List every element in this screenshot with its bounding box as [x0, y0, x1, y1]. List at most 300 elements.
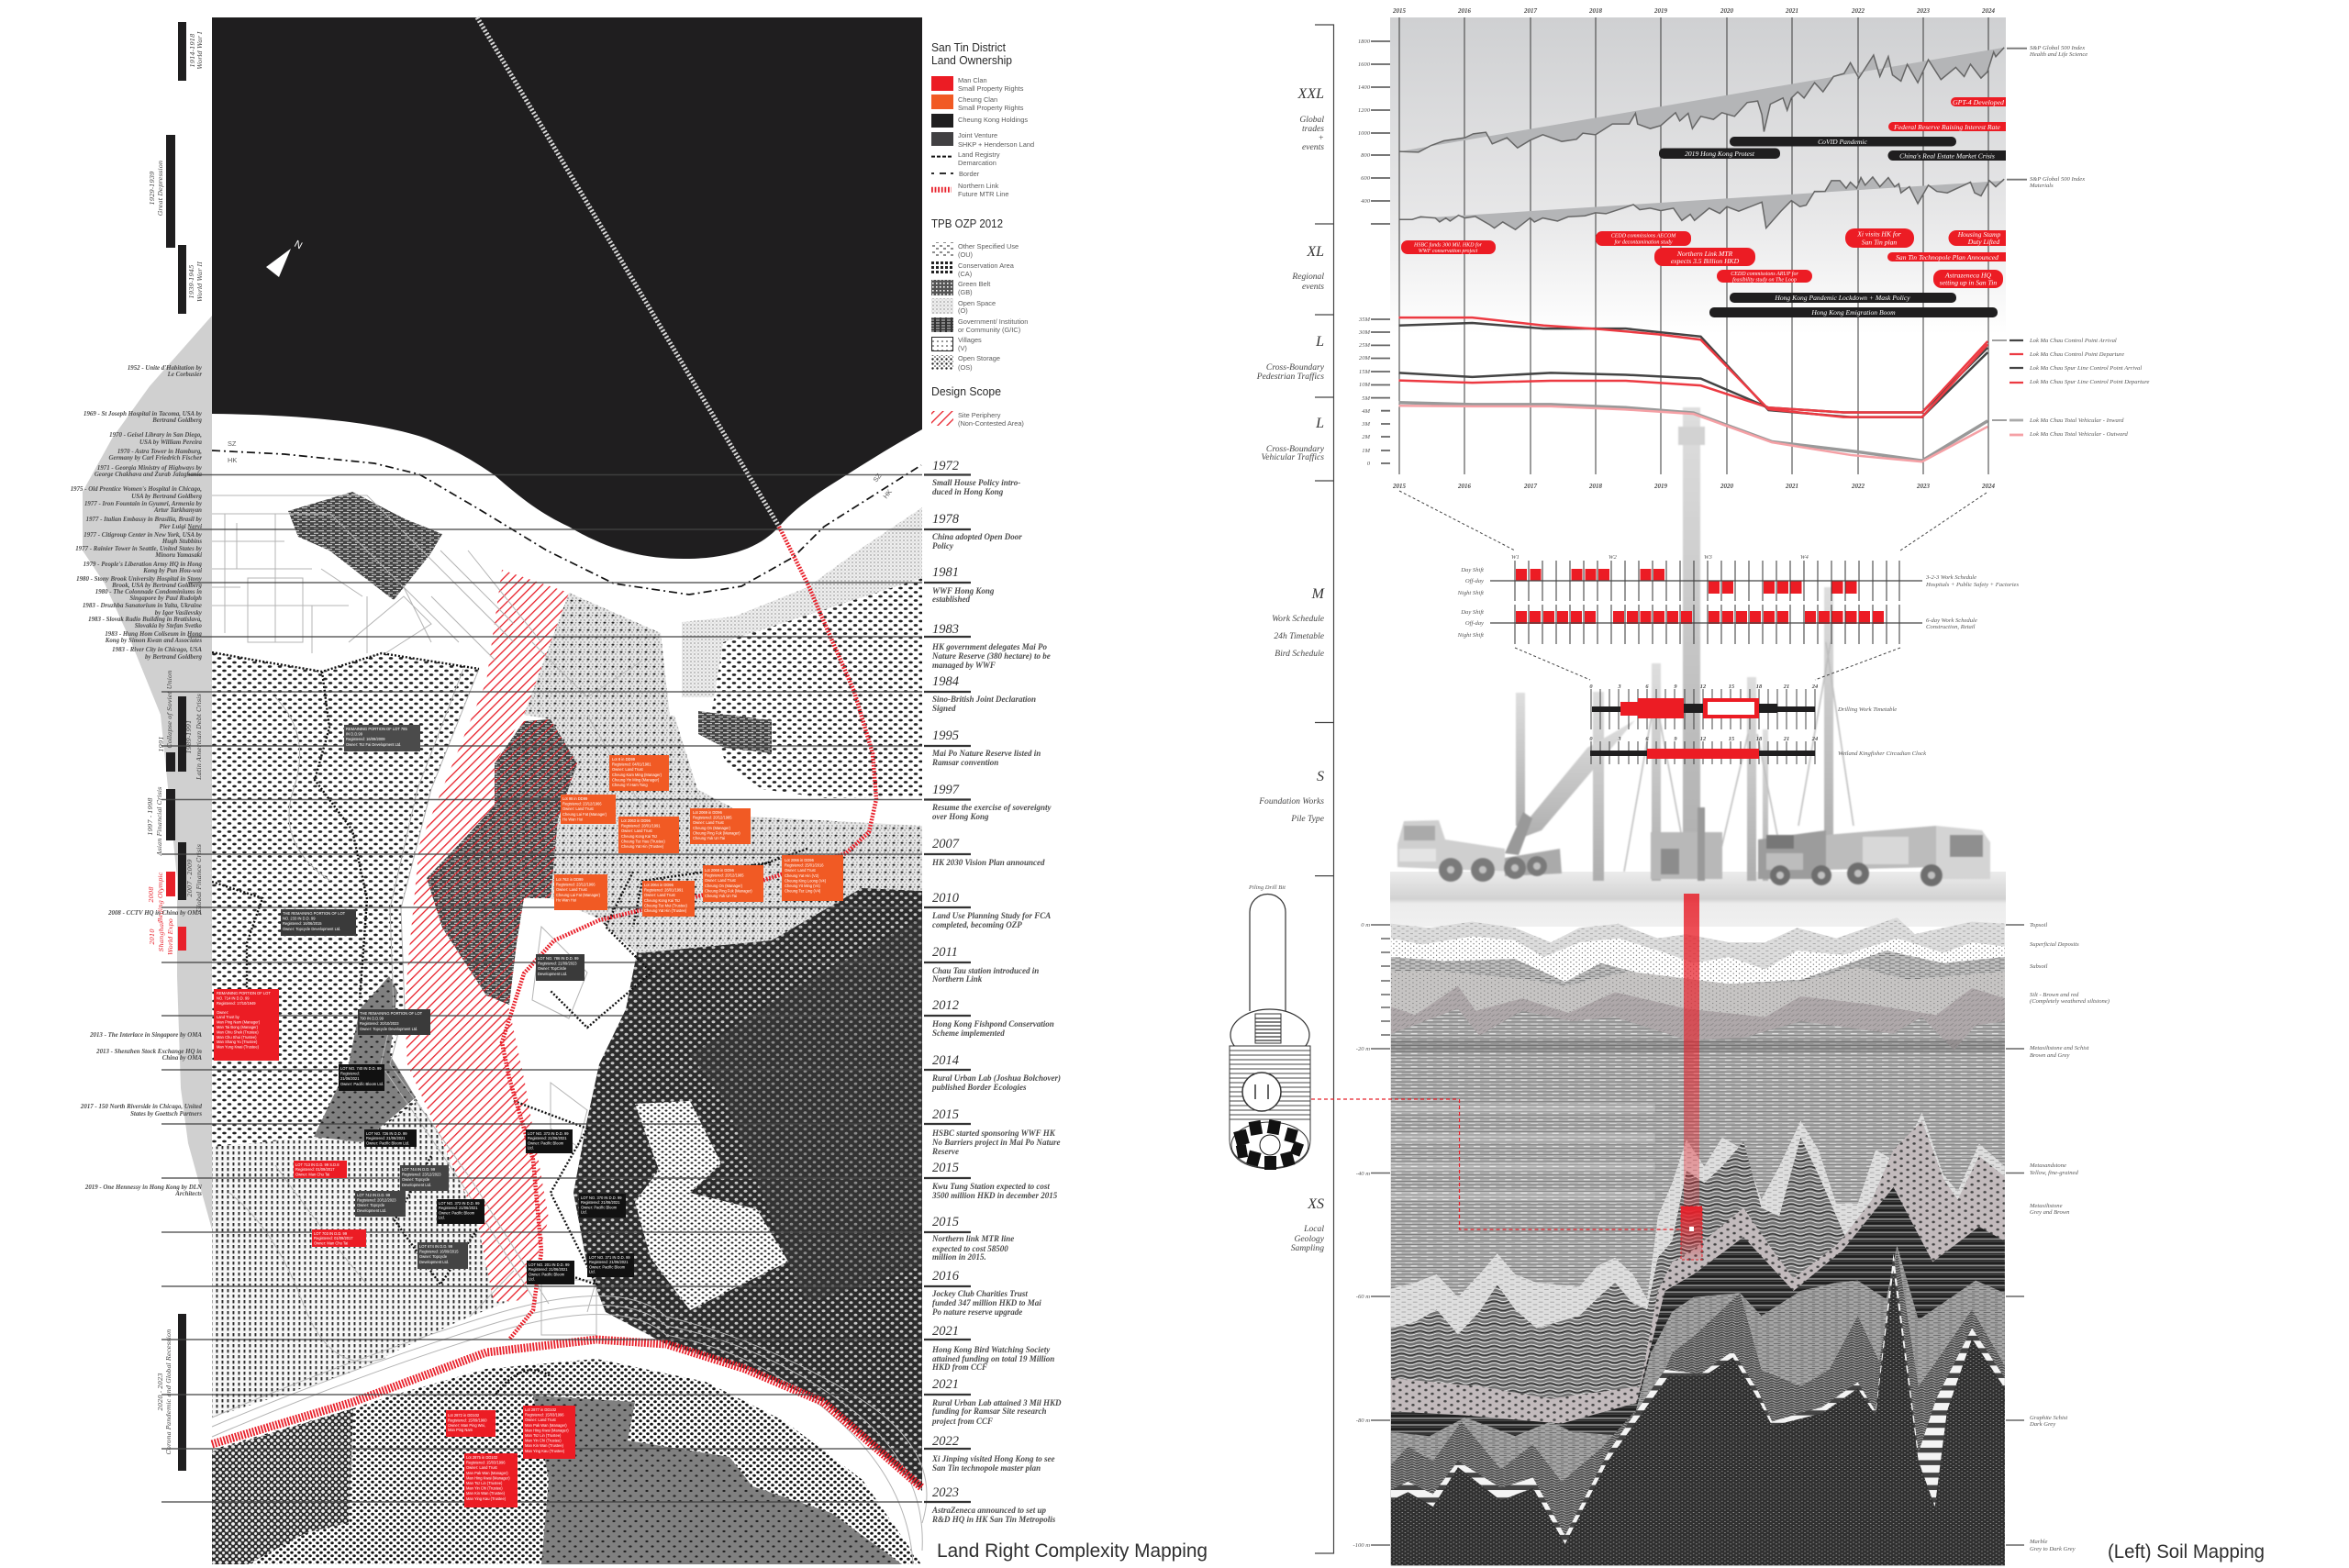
event pills: regional and global events red: San Tin Technopole Plan Announced [1896, 253, 1998, 261]
architecture project list: Artur Tarkhanyan [153, 507, 202, 514]
land parcels: joint venture grey labels: Owner: Topcycle Development Ltd. [360, 1027, 417, 1031]
timeline text: years and events: R&D HQ in HK San Tin Metropolis [931, 1515, 1056, 1524]
legend: San Tin District Land Ownership: Land Ownership [931, 53, 1012, 67]
architecture project list: George Chakhava and Zurab Jalaghania [95, 472, 203, 478]
land parcels: Cheung Kong Holdings black labels: LOT NO. 370 IN D.D. 99 [581, 1195, 622, 1200]
land parcels: Cheung Clan orange labels: Cheung Tsz Mui (Trustee) [644, 903, 688, 907]
icon: piling drill bit [1230, 884, 1310, 1170]
land parcels: joint venture grey labels: Owner: Topcycle Development Ltd. [283, 927, 340, 931]
land parcels: Man Clan red labels: Man Yin Chi (Trustee) [466, 1486, 503, 1491]
timeline bars: historical events: 1997 - 1998 [147, 797, 154, 836]
timeline text: years and events: Ramsar convention [931, 758, 998, 767]
event pills: global events black: China's Real Estate Market Crisis [1899, 152, 1995, 160]
architecture project list: 1977 - Citigroup Center in New York, USA by [83, 532, 203, 539]
series: spur line departure [1398, 341, 1987, 412]
land parcels: Cheung Kong Holdings black labels: Owner: Pacific Bloom Ltd. [340, 1082, 384, 1086]
section labels: Cross-Boundary [1266, 362, 1325, 373]
map zone: right dotted villages [711, 578, 922, 798]
stratum: mid grey schist [1391, 1246, 2005, 1518]
land parcels: joint venture grey labels: 790 IN D.D.99 [360, 1017, 384, 1021]
section labels: Geology [1294, 1234, 1325, 1244]
stratum: superficial deposits [1391, 936, 2005, 1429]
map zone: top-right fine marsh [682, 507, 922, 697]
y axis: index values and traffic: 30M [1358, 329, 1371, 336]
timeline text: years and events: HK government delegates Mai Po [931, 642, 1047, 651]
event pills: global events black: 2019 Hong Kong Protest [1685, 150, 1755, 158]
timeline text: years and events: 2007 [932, 837, 960, 851]
timeline bars: historical events: 1914-1918 [189, 33, 196, 67]
traffic legend: Lok Ma Chau Control Point Arrival [2029, 338, 2117, 344]
timeline text: years and events: 1972 [932, 459, 959, 473]
land parcels: Man Clan red labels: Man Yung Kwai (Trustee) [217, 1045, 260, 1050]
land parcels: Cheung Clan orange labels: Owner: Land Trust [644, 893, 676, 897]
architecture project list: Singapore by Paul Rudolph [129, 595, 202, 602]
legend: San Tin District Land Ownership: Future MTR Line [958, 190, 1008, 198]
architecture project list: 1980 - The Colonnade Condominiums in [95, 589, 202, 595]
map zone: top-left hatched patch [288, 492, 442, 600]
series: spur line arrival [1398, 348, 1987, 412]
timeline bars: historical events: Shanghai [158, 922, 165, 951]
traffic legend: Lok Ma Chau Control Point Departure [2029, 351, 2124, 358]
architecture project list: 1979 - People's Liberation Army HQ in Hong [83, 562, 203, 568]
north arrow [266, 239, 304, 277]
timeline text: years and events: 2021 [932, 1324, 959, 1339]
architecture project list: 1975 - Old Prentice Women's Hospital in Chicago, [71, 486, 202, 493]
border labels: HK [228, 456, 237, 464]
24h kingfisher circadian clock: 6 [1645, 736, 1649, 742]
architecture project list: 1983 - Slovak Radio Building in Bratislava, [88, 617, 202, 623]
24h kingfisher circadian clock: 12 [1700, 736, 1707, 742]
architecture project list: 2008 - CCTV HQ in China by OMA [107, 910, 202, 917]
land parcels: Cheung Clan orange labels: Owner: Land Trust [621, 828, 653, 833]
stratum: dark stripes [1391, 1187, 2005, 1565]
event pills: regional and global events red: setting up in San Tin [1940, 279, 1997, 286]
land parcels: joint venture grey labels: LOT NO. 786 IN D.D. 99 [538, 956, 579, 961]
timeline text: years and events: 2010 [932, 891, 960, 906]
land parcels: Cheung Clan orange labels: Cheung Yin Ming (Manager) [612, 777, 660, 782]
y axis: index values and traffic: 1800 [1358, 39, 1371, 45]
land parcels: Man Clan red labels: Man Kin Wan (Trustee) [525, 1443, 564, 1448]
section labels: XS [1307, 1196, 1324, 1212]
series: health and life science [1399, 48, 2004, 152]
map zone: bottom grey parcel [533, 1396, 902, 1564]
work schedule grid: Day Shift [1460, 609, 1484, 616]
land parcels: Cheung Kong Holdings black labels: LOT NO. 371 IN D.D. 99 [589, 1255, 630, 1260]
land parcels: Cheung Clan orange labels: Ho Wan Hui [556, 897, 576, 902]
legend: TPB OZP 2012: (GB) [958, 288, 973, 296]
y axis: index values and traffic: 10M [1359, 382, 1371, 388]
land parcels: Cheung Kong Holdings black labels: Ltd. [439, 1216, 445, 1220]
timeline text: years and events: Kwu Tung Station expected to cost [931, 1182, 1050, 1191]
sampling callout dashed lines [1311, 1099, 1681, 1229]
timeline text: years and events: San Tin technopole master plan [932, 1463, 1041, 1473]
land parcels: Man Clan red labels: Owner: [217, 1010, 228, 1015]
land parcels: Cheung Clan orange labels: Lot 2068 in DD96 [705, 868, 735, 873]
legend: TPB OZP 2012: Open Storage [958, 354, 1000, 362]
architecture project list: 1980 - Stony Brook University Hospital in Stony [76, 576, 203, 583]
soil layer legend: Dark Grey [2029, 1421, 2055, 1428]
section labels: 24h Timetable [1274, 631, 1325, 641]
land parcels: Man Clan red labels: Owner: Man Chu Tai [295, 1172, 329, 1176]
land parcels: joint venture grey labels: Registered: 23/12/2023 [402, 1173, 441, 1177]
work schedule grid: W3 [1704, 554, 1712, 561]
architecture project list: Architects [174, 1191, 202, 1197]
legend: TPB OZP 2012: Other Specified Use [958, 242, 1019, 250]
architecture project list: Germany by Carl Friedrich Fischer [109, 455, 202, 462]
soil section: geological strata [1391, 917, 2005, 1565]
legend: TPB OZP 2012: (V) [958, 344, 967, 352]
soil depth scale: -20 m [1356, 1046, 1370, 1052]
legend: San Tin District Land Ownership: Small Property Rights [958, 104, 1024, 112]
y axis: index values and traffic: 1600 [1358, 61, 1371, 68]
legend: TPB OZP 2012: (OU) [958, 250, 973, 259]
land parcels: Cheung Clan orange labels: Lot 763 in DD99 [556, 877, 584, 882]
timeline text: years and events: Mai Po Nature Reserve listed in [931, 749, 1041, 758]
24h kingfisher circadian clock: Wetland Kingfisher Circadian Clock [1838, 751, 1927, 757]
land parcels: Cheung Clan orange labels: Registered: 20/12/1985 [693, 816, 732, 820]
timeline text: years and events: established [932, 595, 971, 604]
land parcels: Man Clan red labels: Man Ping Nam (Manager) [217, 1020, 261, 1025]
land parcels: Man Clan red labels: Lot 2872 in DD102 [448, 1413, 480, 1418]
land parcels: Cheung Kong Holdings black labels: LOT NO. 373 IN D.D. 99 [528, 1131, 569, 1136]
timeline bars: historical events: Global Finance Crisis [195, 844, 203, 912]
land parcels: Man Clan red labels: Owner: Man Chu Tai [314, 1240, 348, 1245]
legend: Design Scope: Site Periphery [958, 411, 1001, 419]
timeline bars: historical events: Beijing Olympic [157, 872, 164, 923]
traffic legend: Lok Ma Chau Spur Line Control Point Departure [2029, 379, 2150, 385]
land parcels: Man Clan red labels: Man Pak Wan (Manager) [466, 1471, 508, 1475]
land parcels: Cheung Clan orange labels: Cheung Yit Ming (V4) [785, 884, 821, 888]
S&P index legend: S&P Global 500 Index [2030, 176, 2085, 183]
timeline text: years and events: 2022 [932, 1434, 959, 1449]
year axis labels top and bottom: 2022 [1851, 483, 1865, 490]
event pills: regional and global events red: Xi visits HK for [1856, 229, 1901, 239]
timeline bars: historical events: 1991 [158, 736, 165, 752]
soil layer legend: Superficial Deposits [2030, 941, 2079, 948]
event pills: regional and global events red: CEDD commissions ARUP for [1731, 271, 1798, 277]
land parcels: Cheung Kong Holdings black labels: Owner: Pacific Bloom [439, 1210, 475, 1215]
timeline bars: historical events: 2020 - 2023 [157, 1373, 164, 1412]
year axis labels top and bottom: 2015 [1392, 7, 1406, 15]
24h kingfisher circadian clock: 3 [1617, 736, 1621, 742]
legend: San Tin District Land Ownership: SHKP + Henderson Land [958, 140, 1034, 149]
land parcels: Cheung Kong Holdings black labels [339, 1064, 634, 1284]
northern link future MTR line over sea [477, 17, 779, 527]
architecture project list: Bertrand Goldberg [151, 417, 203, 424]
land parcels: joint venture grey labels: THE REMAINING PORTION OF LOT [283, 911, 346, 916]
legend: TPB OZP 2012: (CA) [958, 270, 972, 278]
y axis: index values and traffic: 1200 [1358, 107, 1371, 114]
timeline text: years and events: Nature Reserve (380 hectare) to be [931, 651, 1051, 661]
timeline text: years and events: funding for Ramsar Site research [932, 1407, 1047, 1416]
map zone: small centre hatched patch [698, 711, 772, 753]
land parcels: Cheung Kong Holdings black labels: Registered: 21/06/2021 [528, 1136, 567, 1140]
land parcels: Cheung Kong Holdings black labels: Owner: Pacific Bloom Ltd. [366, 1140, 409, 1145]
land parcels: Man Clan red labels: Lot 2877 in DD102 [525, 1407, 557, 1412]
timeline horizontal lines across map [161, 475, 922, 1502]
land parcels: Cheung Kong Holdings black labels: Registered: 21/06/2021 [589, 1260, 629, 1264]
land parcels: joint venture grey labels: Development Ltd. [402, 1183, 431, 1187]
chart background gradient [1390, 17, 2006, 334]
traffic legend: Lok Ma Chau Total Vehicular - Inward [2029, 417, 2124, 424]
land parcels: Man Clan red labels: NO. 714 IN D.D. 99 [217, 995, 250, 1000]
land parcels: Cheung Kong Holdings black labels: Registered: 21/06/2021 [366, 1136, 406, 1140]
land parcels: Cheung Clan orange labels: Cheung Tsz Ling (V4) [785, 889, 821, 894]
site periphery: red hatched design scope [405, 570, 569, 1302]
legend: TPB OZP 2012: Conservation Area [958, 261, 1015, 270]
work schedule grid [1457, 554, 2019, 644]
event pills: regional and global events red: for decontamination study [1615, 239, 1673, 246]
land parcels: Cheung Clan orange labels: Owner: Land Trust [556, 887, 588, 892]
timeline text: years and events: attained funding on total 19 Million [932, 1354, 1054, 1363]
timeline text: years and events: Resume the exercise of sovereignty [931, 803, 1052, 812]
series: vehicular inward [1398, 403, 1987, 461]
land parcels: Cheung Kong Holdings black labels: Owner: Pacific Bloom [581, 1205, 618, 1209]
land parcels: Man Clan red labels: Owner: Land Trust [525, 1418, 557, 1422]
legend: TPB OZP 2012: (OS) [958, 363, 973, 372]
architecture project list: Slovakia by Stefan Svetko [135, 623, 203, 629]
timeline text: years and events: Jockey Club Charities Trust [931, 1289, 1028, 1298]
soil layer legend: Marble [2029, 1539, 2047, 1545]
legend: San Tin District Land Ownership: Cheung Clan [958, 95, 997, 104]
land parcels: Man Clan red labels: Registered: 01/09/2017 [295, 1167, 335, 1172]
section labels: Vehicular Traffics [1261, 452, 1324, 462]
event pills: regional and global events red: Federal Reserve Raising Interest Rate [1893, 123, 2000, 131]
timeline text: years and events: 2015 [932, 1161, 959, 1175]
timeline text: years and events: 2012 [932, 998, 959, 1013]
legend: San Tin District Land Ownership: Cheung Kong Holdings [958, 116, 1028, 124]
soil depth scale: 0 m [1361, 922, 1370, 929]
section labels: + [1319, 133, 1324, 143]
y axis: index values and traffic: 35M [1358, 317, 1371, 323]
land parcels: Cheung Kong Holdings black labels: Ltd. [528, 1146, 534, 1151]
land parcels: joint venture grey labels: REMAINING PORTION OF LOT 785 [346, 727, 407, 731]
year axis labels top and bottom: 2017 [1523, 483, 1538, 490]
timeline text: years and events: 2011 [932, 945, 958, 960]
24h drilling timetable: 18 [1756, 684, 1763, 690]
timeline bars: historical events: World War II [196, 261, 204, 302]
timeline bars: historical events: 1939-1945 [188, 265, 195, 298]
architecture project list: 1983 - Druzhba Sanatorium in Yalta, Ukraine [83, 603, 202, 609]
land parcels: Cheung Clan orange labels: Cheung Yat Hin (V2) [785, 873, 819, 878]
land parcels: joint venture grey labels: IN D.D.99 [346, 732, 363, 737]
year axis labels top and bottom: 2018 [1588, 483, 1602, 490]
land parcels: Cheung Clan orange labels: Registered: 20/12/1985 [705, 873, 744, 878]
land parcels: Man Clan red labels: Man Ying Kau (Trustee) [525, 1449, 565, 1453]
land parcels: Man Clan red labels: REMAINING PORTION OF LOT [217, 991, 271, 995]
land parcels: joint venture grey labels: Development Ltd. [538, 972, 567, 976]
map zone: dark right woodland [573, 888, 922, 1491]
land parcels: Cheung Clan orange labels: Cheung Lai Fat (Manager) [556, 893, 601, 897]
left brace scale with section ticks [1315, 25, 1334, 1553]
work schedule grid: Off-day [1465, 620, 1484, 627]
land parcels: joint venture grey labels: Owner: Topcycle [419, 1254, 448, 1259]
section labels: XXL [1297, 86, 1324, 102]
land parcels: Cheung Clan orange labels: Owner: Land Trust [562, 806, 595, 811]
timeline text: years and events: expected to cost 58500 [932, 1244, 1008, 1253]
soil layer legend: Brown and Grey [2030, 1052, 2070, 1059]
S&P index legend: S&P Global 500 Index [2030, 45, 2085, 51]
stratum: subsoil [1391, 951, 2005, 1396]
land parcels: Man Clan red labels: Man Tsz Lin (Trustee) [466, 1481, 503, 1485]
timeline ticks to the right of the map [924, 475, 971, 1502]
section labels: Pile Type [1290, 814, 1325, 824]
soil depth scale: -100 m [1353, 1542, 1370, 1549]
year axis labels top and bottom: 2016 [1457, 7, 1472, 15]
land parcels: Cheung Clan orange labels: Cheung Kong Kai Tsz [621, 834, 657, 839]
timeline bars: historical events: 2010 [149, 929, 156, 946]
land parcels: Man Clan red labels: Owner: Land Trust [466, 1465, 498, 1470]
architecture project list: 1969 - St Joseph Hospital in Tacoma, USA by [83, 411, 203, 417]
land parcels: joint venture grey labels: Owner: Tsz Fai Development Ltd. [346, 742, 401, 747]
legend: Design Scope [931, 384, 1024, 428]
land parcels: joint venture grey labels: Registered: 16/09/2009 [346, 737, 385, 741]
timeline bars: historical events: 2007 - 2009 [186, 859, 194, 898]
architecture project list: 2013 - Shenzhen Stock Exchange HQ in [95, 1049, 202, 1055]
architecture project list: 1977 - Italian Embassy in Brasilia, Brasil by [86, 517, 203, 523]
architecture project list: Minoru Yamasaki [154, 552, 202, 559]
soil depth scale: -80 m [1356, 1418, 1370, 1424]
land parcels: Man Clan red labels: Registered: 15/03/1996 [466, 1461, 506, 1465]
map zone: darker woodland overlay [690, 917, 922, 1303]
year axis labels top and bottom: 2019 [1653, 7, 1668, 15]
work schedule grid: W1 [1511, 554, 1520, 561]
event pills: global events black [1659, 137, 2006, 317]
y axis: index values and traffic: 400 [1361, 198, 1371, 205]
land parcels: Man Clan red labels [214, 989, 575, 1507]
series: control point arrival [1398, 323, 1987, 417]
timeline text: years and events: HK 2030 Vision Plan announced [931, 858, 1045, 867]
timeline text: years and events: Rural Urban Lab attained 3 Mil HKD [931, 1398, 1062, 1407]
architecture project list: Le Corbusier [167, 372, 202, 378]
y axis: index values and traffic: 4M [1362, 408, 1371, 415]
section labels: L [1315, 334, 1324, 350]
land parcels: Cheung Kong Holdings black labels: LOT NO. 740 IN D.D. 99 [340, 1066, 382, 1071]
series: control point departure [1398, 317, 1987, 417]
land parcels: joint venture grey labels: Owner: TopCircle [538, 966, 567, 971]
land parcels: joint venture grey labels [281, 725, 584, 1269]
section labels: Global [1299, 115, 1324, 125]
black sea area with river mouth [212, 17, 922, 559]
land parcels: Cheung Clan orange labels: Cheung Kam Ming (Manager) [612, 773, 662, 777]
year axis labels top and bottom: 2020 [1720, 483, 1734, 490]
land parcels: joint venture grey labels: Owner: Topcycle [402, 1177, 430, 1182]
timeline bars: historical events [147, 22, 204, 1471]
land parcels: Cheung Clan orange labels: Owner: Land Trust [785, 868, 817, 873]
timeline text: years and events: 2015 [932, 1107, 959, 1122]
event pills: regional and global events red: Duty Lifted [1967, 238, 1999, 246]
land parcels: Cheung Clan orange labels: Cheung Yi Ham Tong [612, 783, 648, 787]
land parcels: Cheung Clan orange labels: Registered: 28/01/1991 [621, 824, 661, 828]
y axis: index values and traffic: 15M [1359, 369, 1371, 375]
timeline text: years and events: 1995 [932, 728, 959, 743]
timeline bars: historical events: World Expo [167, 918, 174, 955]
timeline text: years and events: HSBC started sponsoring WWF HK [931, 1129, 1056, 1138]
24h drilling timetable [1589, 684, 1897, 729]
stratum: metasiltstone and schist [1391, 1009, 2005, 1430]
timeline bars: historical events: 1929-1939 [149, 171, 156, 205]
land parcels: Cheung Kong Holdings black labels: Registered: 21/06/2021 [529, 1267, 568, 1272]
year axis labels top and bottom: 2021 [1785, 483, 1798, 490]
year axis labels top and bottom: 2023 [1916, 483, 1931, 490]
panel: land right complexity map [212, 17, 927, 1565]
work schedule grid: Night Shift [1457, 632, 1484, 639]
legend: Design Scope: Design Scope [931, 384, 1001, 398]
year axis labels top and bottom: 2024 [1981, 483, 1995, 490]
land parcels: Man Clan red labels: Man Tsz Lin (Trustee) [525, 1433, 562, 1438]
work schedule grid: 6-day Work Schedule [1926, 617, 1977, 624]
land parcels: joint venture grey labels: Registered: 20/12/2023 [357, 1198, 396, 1203]
land parcels: Cheung Clan orange labels: Owner: Land Trust [705, 878, 737, 883]
24h kingfisher circadian clock: 24 [1811, 736, 1818, 742]
timeline bars: historical events: World War I [196, 31, 204, 70]
traffic legend [1992, 338, 2150, 438]
land parcels: Man Clan red labels: Registered: 01/09/2017 [314, 1236, 353, 1240]
land parcels: Cheung Clan orange labels: Cheung Lai Fat (Manager) [562, 812, 607, 817]
24h kingfisher circadian clock: 0 [1589, 736, 1593, 742]
timeline text: years and events: Hong Kong Fishpond Conservation [931, 1019, 1054, 1029]
year axis labels top and bottom: 2018 [1588, 7, 1602, 15]
architecture project list: Kong by Pun Hou-wai [142, 568, 202, 574]
work schedule grid: 3-2-3 Work Schedule [1925, 574, 1976, 581]
legend: San Tin District Land Ownership: San Tin District [931, 40, 1006, 54]
land parcels: Man Clan red labels: Owner: Man Ping Wai, [448, 1423, 485, 1428]
stratum: pink dotted [1391, 1121, 2005, 1424]
shift blocks: 6-day schedule [1516, 611, 1884, 624]
legend: TPB OZP 2012: Government/ Institution [958, 317, 1028, 326]
land parcels: Man Clan red labels: Registered: 17/10/1949 [217, 1001, 256, 1006]
map zone: lower dense dots [212, 1359, 921, 1564]
title: Left Soil Mapping: (Left) Soil Mapping [2108, 1541, 2265, 1562]
land parcels: joint venture grey labels: Registered: 20/10/2023 [360, 1021, 399, 1026]
map zone: central fine dotted [524, 593, 922, 953]
timeline text: years and events: No Barriers project in Mai Po Nature [931, 1138, 1061, 1147]
event pills: regional and global events red: WWF conservation project [1419, 249, 1478, 254]
soil layer legend: Metasiltstone [2029, 1203, 2063, 1209]
year axis labels top and bottom: 2021 [1785, 7, 1798, 15]
legend: TPB OZP 2012: or Community (G/IC) [958, 326, 1020, 334]
land parcels: joint venture grey labels: LOT 674 IN D.D. 99 [419, 1244, 453, 1249]
y axis: index values and traffic: 20M [1359, 355, 1371, 361]
timeline text: years and events [931, 459, 1062, 1524]
timeline text: years and events: 2023 [932, 1485, 959, 1500]
series: materials [1399, 177, 2004, 229]
section labels: Sampling [1291, 1243, 1324, 1253]
land parcels: Man Clan red labels: Man Tai Bong (Manager) [217, 1025, 259, 1029]
timeline text: years and events: 1983 [932, 622, 959, 637]
legend: TPB OZP 2012: Open Space [958, 299, 996, 307]
architecture project list: 1952 - Unite d'Habitation by [128, 365, 203, 372]
land parcels: Man Clan red labels: Man Chu Shui (Trustee) [217, 1035, 257, 1040]
legend: San Tin District Land Ownership: Joint Venture [958, 131, 997, 139]
land parcels: joint venture grey labels: NO. 233 IN D.D. 99 [283, 917, 316, 921]
land parcels: Cheung Kong Holdings black labels: Owner: Pacific Bloom [589, 1264, 626, 1269]
24h kingfisher circadian clock: 9 [1674, 736, 1677, 742]
stratum: topsoil [1391, 917, 2005, 991]
year axis labels top and bottom: 2016 [1457, 483, 1472, 490]
timeline text: years and events: million in 2015. [932, 1252, 986, 1262]
series: vehicular outward [1398, 406, 1987, 462]
land parcels: Cheung Clan orange labels: Cheung Yuk Un Tai [693, 836, 725, 840]
stratum: metasiltstone hatch [1391, 1138, 2005, 1565]
section labels: Work Schedule [1272, 614, 1325, 624]
legend: San Tin District Land Ownership: Man Clan [958, 76, 987, 84]
timeline text: years and events: China adopted Open Door [932, 532, 1022, 541]
soil layer legend: (Completely weathered siltstone) [2030, 998, 2110, 1005]
legend: San Tin District Land Ownership: Land Registry [958, 150, 1000, 159]
construction scene: drilling rigs and trucks [1397, 407, 1990, 886]
timeline bars: historical events: Latin American Debt Crisis [195, 694, 203, 781]
